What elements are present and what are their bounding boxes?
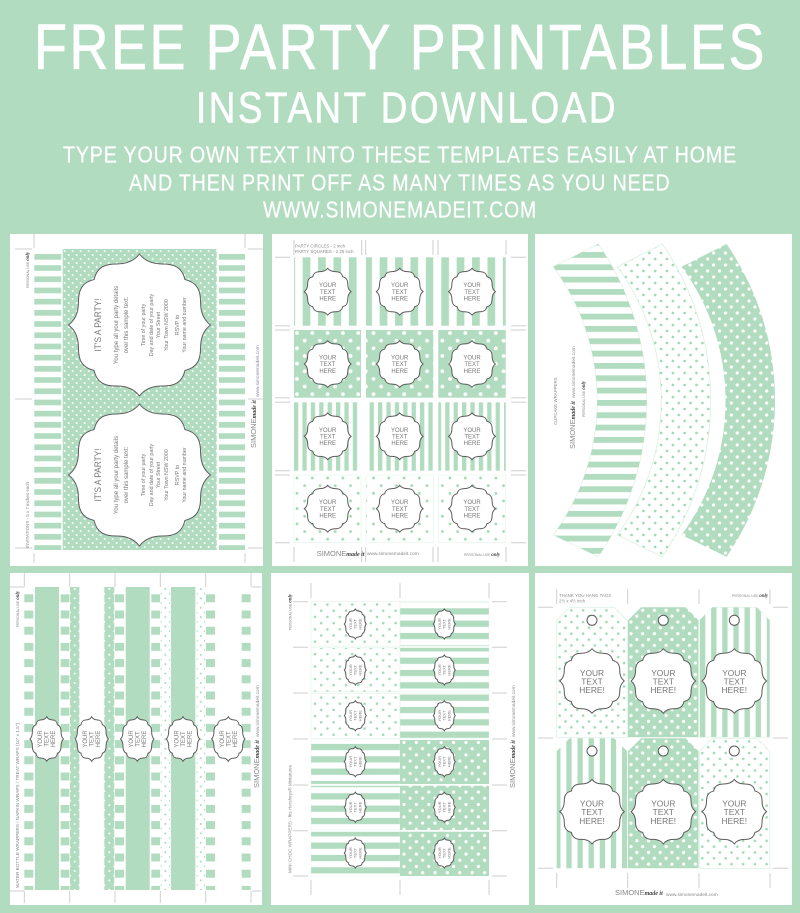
invitation card bottom: [68, 404, 210, 546]
wrapper badges: YOUR: [83, 730, 89, 748]
choc badges right: TEXT: [442, 847, 447, 858]
choc badges right: YOUR: [437, 801, 442, 813]
wrapper badges: TEXT: [45, 731, 51, 747]
tags size label: THANK YOU HANG TAGS: [559, 593, 611, 598]
choc badges right: HERE: [446, 664, 451, 676]
personal use label: PERSONAL USE only: [732, 594, 769, 599]
badges row 1: TEXT: [464, 290, 480, 296]
website label: www.simonemadeit.com: [666, 892, 718, 898]
badges row 4: [304, 485, 495, 532]
badges row 4: HERE: [391, 514, 408, 520]
choc badges right: YOUR: [437, 847, 442, 859]
personal use label: PERSONAL USE only: [288, 593, 294, 630]
invitations sheet: [10, 234, 263, 566]
right stripes: [219, 254, 245, 550]
badges row 3: YOUR: [463, 428, 481, 434]
striped and dotted bands: [24, 587, 251, 890]
tag badges top: YOUR: [651, 668, 675, 678]
choc badges right: TEXT: [442, 756, 447, 767]
website label: www.simonemadeit.com: [255, 685, 261, 737]
choc badges left: TEXT: [353, 847, 358, 858]
polka dot band: [63, 249, 217, 550]
choc badges left: YOUR: [348, 847, 353, 859]
logo: SIMONEmade it: [615, 888, 663, 897]
wrappers label: CUPCAKE WRAPPERS: [553, 377, 558, 425]
invitation card top: IT'S A PARTY!: [93, 298, 104, 352]
invitation card bottom: You type all your party details: [114, 436, 120, 514]
striped rows left: [311, 740, 400, 876]
tag badges bottom: HERE!: [650, 816, 676, 826]
header: [34, 11, 767, 222]
wrapper badges: TEXT: [135, 731, 141, 747]
wrapper badges: HERE: [142, 731, 148, 747]
choc badges left: TEXT: [353, 618, 358, 629]
wrapper badges: HERE: [188, 731, 194, 747]
panel: mini choc wrappers: [271, 573, 529, 905]
badges row 4: HERE: [319, 514, 336, 520]
badges row 4: YOUR: [391, 500, 409, 506]
invitation card top: [68, 254, 210, 396]
invitation card bottom: Day and date of your party: [149, 443, 155, 506]
invitation card top: Your name and number: [182, 297, 188, 353]
invitations size label: INVITATIONS - 5 x 7 inches each: [25, 481, 30, 548]
tag badges bottom: TEXT: [653, 807, 674, 817]
choc badges left: HERE: [357, 801, 362, 813]
choc badges left: HERE: [357, 847, 362, 859]
tag badges bottom: YOUR: [580, 798, 604, 808]
invitation card top: over this sample text:: [124, 296, 130, 353]
choc badges left: TEXT: [353, 710, 358, 721]
choc badges left: TEXT: [353, 664, 358, 675]
choc badges left: YOUR: [348, 664, 353, 676]
choc badges right: YOUR: [437, 618, 442, 630]
badges row 2: HERE: [464, 369, 480, 375]
badges row 3: HERE: [391, 441, 408, 447]
wrapper badges: TEXT: [181, 731, 187, 747]
badges row 1: HERE: [391, 297, 408, 303]
wrapper badges: HERE: [96, 731, 102, 747]
row 4 white polka: [294, 475, 506, 543]
invitation card bottom: over this sample text:: [124, 446, 130, 503]
green polka rows: [400, 740, 489, 876]
invitation card bottom: Time of your party: [141, 453, 147, 496]
wrapper badges: YOUR: [174, 730, 180, 748]
tag badges bottom: YOUR: [651, 798, 675, 808]
tag badges top: [560, 649, 767, 713]
badges row 1: HERE: [319, 297, 336, 303]
logo: SIMONEmade it: [252, 740, 261, 788]
badges row 3: TEXT: [392, 434, 408, 440]
dotted wrapper: [617, 244, 711, 557]
panel: thank you hang tags: [535, 573, 792, 905]
invitation card top: You type all your party details: [114, 286, 120, 364]
badges row 4: TEXT: [320, 507, 336, 513]
website label: www.simonemadeit.com: [255, 345, 261, 397]
wrapper badges: TEXT: [90, 731, 96, 747]
badges row 3: [304, 413, 495, 460]
choc badges left: TEXT: [353, 756, 358, 767]
choc badges left: YOUR: [348, 618, 353, 630]
choc badges right: TEXT: [442, 710, 447, 721]
tag badges top: HERE!: [650, 685, 676, 695]
wrappers sheet: [10, 573, 262, 905]
invitation card top: Time of your party: [141, 303, 147, 346]
row 3 thin stripes: [294, 402, 506, 471]
solid green bands: [35, 587, 195, 890]
choc badges left: YOUR: [348, 756, 353, 767]
choc badges left: HERE: [357, 664, 362, 676]
tag 4: stripes: [557, 738, 627, 868]
tags size label: 2½ x 4½ inch: [559, 598, 586, 604]
badges row 1: TEXT: [392, 290, 408, 296]
choc size label: MINI CHOC WRAPPERS - fits Hersheys® Miniatures: [288, 764, 292, 873]
tag badges top: TEXT: [724, 676, 745, 686]
badges row 4: HERE: [464, 514, 480, 520]
choc sheet: [271, 573, 529, 905]
tag 5: green polka: [628, 738, 698, 868]
tag badges top: TEXT: [581, 676, 603, 686]
tag badges bottom: [560, 779, 767, 844]
tag badges top: HERE!: [721, 685, 747, 695]
wrapper badges: YOUR: [129, 730, 135, 748]
choc badges left: TEXT: [353, 802, 358, 812]
choc badges right: HERE: [446, 618, 451, 630]
size label: PARTY SQUARES - 2.25 inch: [295, 249, 354, 254]
striped wrapper: [553, 244, 647, 557]
panel: party circles and squares: [272, 234, 528, 566]
badges row 2: [304, 341, 495, 387]
description line 2: AND THEN PRINT OFF AS MANY TIMES AS YOU NEED: [129, 169, 670, 195]
choc badges right: HERE: [446, 710, 451, 721]
personal use label: PERSONAL USE only: [582, 380, 587, 417]
white polka rows: [311, 602, 400, 738]
choc badges left: YOUR: [348, 710, 353, 721]
badges row 4: YOUR: [463, 500, 481, 506]
badges row 1: TEXT: [320, 290, 336, 296]
badges row 1: YOUR: [463, 283, 481, 289]
badges row 4: YOUR: [319, 500, 337, 506]
panel: cupcake wrappers: [535, 234, 792, 566]
row 2 green polka: [294, 330, 506, 398]
invitation card bottom: Your Street: [156, 461, 162, 488]
row 1 wide stripes: [294, 257, 506, 326]
choc badges right: YOUR: [437, 710, 442, 721]
personal use label: PERSONAL USE only: [26, 251, 31, 288]
badges row 3: YOUR: [391, 428, 409, 434]
website label: www.simonemadeit.com: [367, 551, 419, 557]
tag badges bottom: HERE!: [579, 816, 605, 826]
tag badges top: YOUR: [722, 668, 746, 678]
badges row 1: [304, 268, 495, 315]
wrapper badges: YOUR: [220, 730, 226, 748]
badges row 1: HERE: [464, 297, 480, 303]
badges row 1: YOUR: [391, 283, 409, 289]
choc badges right: HERE: [446, 801, 451, 813]
website: WWW.SIMONEMADEIT.COM: [263, 196, 537, 222]
cupcake sheet: [535, 234, 792, 566]
choc badges right: YOUR: [437, 756, 442, 767]
badges row 2: HERE: [319, 369, 336, 375]
green polka wrapper: [682, 244, 775, 557]
choc badges right: TEXT: [442, 618, 447, 629]
choc badges left: HERE: [357, 710, 362, 721]
size label: PARTY CIRCLES - 2 inch: [295, 244, 346, 248]
invitation card bottom: Your name and number: [182, 447, 188, 503]
choc badges right: TEXT: [442, 664, 447, 675]
badges row 3: YOUR: [319, 428, 337, 434]
tag 2: green polka: [628, 607, 698, 737]
wrapper badges: [30, 717, 245, 761]
badges row 2: YOUR: [391, 356, 409, 362]
choc badges left: [344, 609, 366, 868]
badges row 3: TEXT: [464, 434, 480, 440]
tag 6: white polka: [699, 738, 770, 868]
badges row 3: TEXT: [320, 434, 336, 440]
website label: www.simonemadeit.com: [511, 685, 517, 737]
invitation card bottom: Your Town NSW 2000: [164, 449, 170, 501]
tag badges bottom: TEXT: [581, 807, 603, 817]
tags sheet: [535, 573, 792, 905]
badges row 2: TEXT: [464, 362, 480, 368]
choc badges left: HERE: [357, 756, 362, 767]
tag badges top: TEXT: [653, 676, 674, 686]
panel: water bottle wrappers: [10, 573, 262, 905]
wrapper badges: TEXT: [226, 731, 232, 747]
choc badges left: HERE: [357, 618, 362, 630]
choc badges right: HERE: [446, 847, 451, 859]
logo: SIMONEmade it: [249, 400, 258, 448]
wrapper badges: HERE: [233, 731, 239, 747]
tag badges top: YOUR: [580, 668, 604, 678]
tag badges bottom: YOUR: [722, 798, 746, 808]
badges row 2: YOUR: [319, 356, 337, 362]
badges row 2: YOUR: [463, 356, 481, 362]
badges row 1: YOUR: [319, 283, 337, 289]
invitation card bottom: IT'S A PARTY!: [93, 448, 104, 502]
website label: www.simonemadeit.com: [571, 346, 577, 398]
tag holes: [587, 615, 739, 756]
left stripes: [34, 254, 61, 550]
badges row 4: TEXT: [392, 507, 408, 513]
tag 1: white polka: [557, 607, 627, 737]
choc badges right: HERE: [446, 756, 451, 767]
badges row 2: TEXT: [320, 362, 336, 368]
circles sheet: [272, 234, 528, 566]
invitation card top: Your Street: [156, 311, 162, 338]
invitation card bottom: RSVP to: [175, 465, 181, 485]
logo: SIMONEmade it: [508, 740, 517, 788]
tag badges bottom: TEXT: [724, 807, 745, 817]
badges row 4: TEXT: [464, 507, 480, 513]
subtitle: INSTANT DOWNLOAD: [196, 84, 618, 133]
choc badges left: YOUR: [348, 801, 353, 813]
personal use label: PERSONAL USE only: [16, 590, 21, 627]
striped rows right: [400, 602, 489, 738]
tag badges bottom: HERE!: [721, 816, 747, 826]
badges row 3: HERE: [319, 441, 336, 447]
personal use label: PERSONAL USE only: [464, 553, 501, 558]
wrapper badges: HERE: [51, 731, 57, 747]
invitation card top: RSVP to: [175, 315, 181, 335]
logo: SIMONEmade it: [317, 549, 365, 558]
panel: invitations: [10, 234, 263, 566]
wrappers size label: WATER BOTTLE WRAPPERS / NAPKIN WRAPS / TREAT WRAPS (10" x 1.5"): [15, 722, 20, 888]
choc badges right: [433, 609, 455, 868]
tag 3: stripes: [699, 607, 770, 737]
choc badges right: YOUR: [437, 664, 442, 676]
invitation card top: Day and date of your party: [149, 293, 155, 356]
wrapper badges: YOUR: [38, 730, 44, 748]
choc badges right: TEXT: [442, 802, 447, 812]
badges row 3: HERE: [464, 441, 480, 447]
tag badges top: HERE!: [579, 685, 605, 695]
invitation card top: Your Town NSW 2000: [164, 299, 170, 351]
badges row 2: TEXT: [392, 362, 408, 368]
badges row 2: HERE: [391, 369, 408, 375]
logo: SIMONEmade it: [568, 401, 577, 449]
